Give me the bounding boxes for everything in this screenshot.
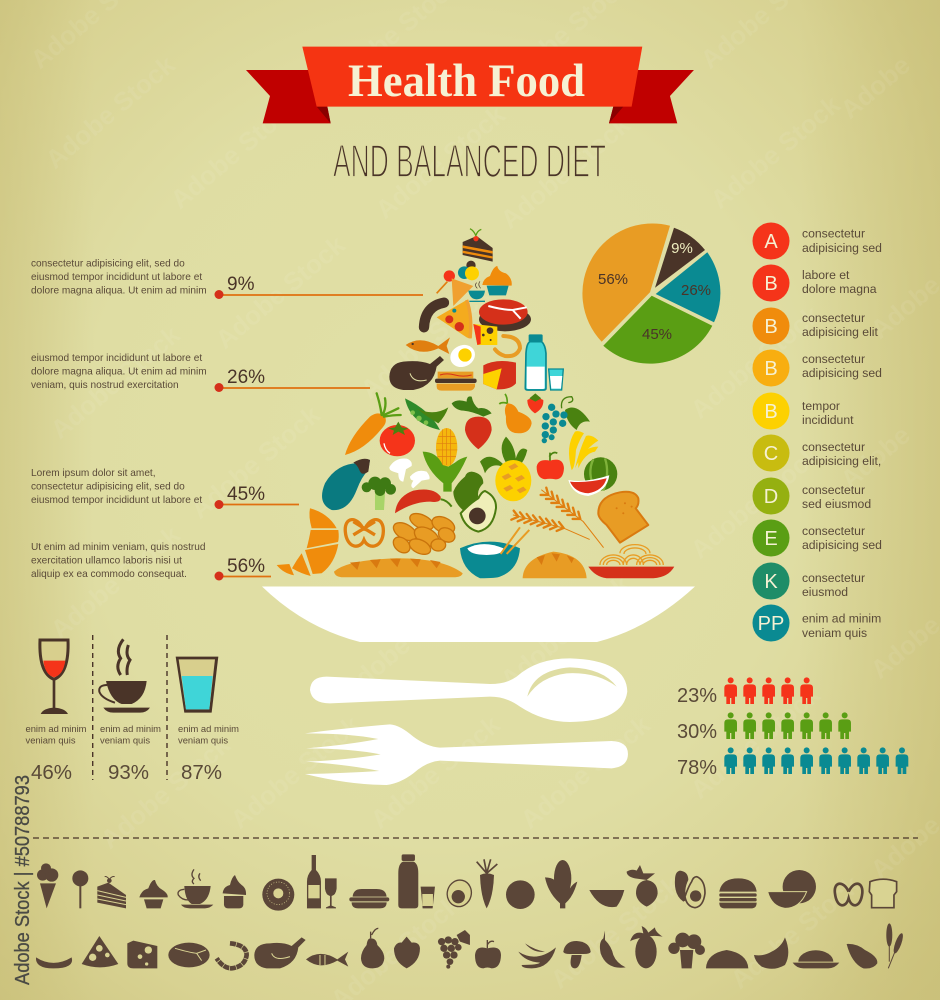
row 30%	[677, 712, 851, 743]
icon: mushrooms	[389, 458, 430, 488]
stock id caption: Adobe Stock | #50788793	[12, 775, 34, 985]
icon: baguette	[334, 558, 463, 577]
callout 26%: dolore magna aliqua. Ut enim ad minim	[31, 366, 207, 378]
legend B2: B	[764, 316, 778, 338]
food pyramid	[277, 229, 674, 578]
legend PP: PP	[758, 613, 784, 635]
icon: bananas	[569, 431, 598, 470]
icon: cupcake	[482, 266, 512, 295]
legend B4: incididunt	[802, 413, 854, 427]
ribbon right tail	[609, 70, 694, 123]
legend K: eiusmod	[802, 585, 848, 599]
title: Health Food: Health Food	[348, 55, 585, 107]
icon: strawberry	[527, 393, 543, 413]
icon: fish	[406, 337, 450, 354]
legend PP	[752, 604, 881, 642]
callout 9%	[31, 258, 423, 299]
icon: avocado	[675, 871, 705, 908]
legend B2: adipisicing elit	[802, 325, 878, 339]
legend PP: enim ad minim	[802, 612, 881, 626]
legend B1: dolore magna	[802, 282, 877, 296]
row 78%	[677, 747, 908, 779]
icon: watermelon	[768, 870, 816, 908]
icon: wine glass	[325, 878, 337, 908]
legend C: consectetur	[802, 440, 865, 454]
icon: cheese	[127, 941, 157, 968]
icon: fish	[306, 952, 348, 967]
icon: toast	[869, 879, 897, 908]
drink captions: veniam quis	[26, 734, 76, 746]
icon: cone	[37, 863, 58, 908]
icon: grapes	[542, 397, 590, 443]
icon: bananas	[518, 943, 556, 968]
legend B2	[752, 308, 878, 344]
legend E: consectetur	[802, 524, 865, 538]
icon row right	[475, 859, 905, 969]
icon: eggplant	[322, 459, 370, 510]
drink captions: veniam quis	[178, 734, 228, 746]
icon: carrot	[477, 859, 497, 908]
callout 45%	[31, 468, 299, 509]
icon: wheat	[886, 923, 905, 968]
callout 26%	[31, 353, 370, 392]
icon: pasta plate	[588, 545, 674, 578]
icon: wine glass	[40, 640, 68, 714]
legend D: D	[764, 486, 778, 508]
icon: sausage	[424, 303, 444, 327]
drink captions: veniam quis	[100, 734, 150, 746]
text: Adobe Stock	[335, 579, 476, 705]
icon: pretzel	[835, 884, 862, 905]
pie chart: 9%	[671, 240, 693, 257]
legend K: K	[764, 571, 778, 593]
ribbon centre	[302, 47, 642, 107]
drink percentages	[31, 761, 222, 784]
text: Adobe Stock	[355, 279, 496, 405]
icon: pretzel	[345, 520, 383, 546]
icon: tomato	[506, 880, 535, 909]
legend C	[752, 434, 881, 472]
text: Adobe Stock	[40, 49, 181, 175]
callout 45%: eiusmod tempor incididunt ut labore et	[31, 495, 202, 506]
plate	[262, 586, 695, 642]
icon: hot dog	[435, 372, 477, 391]
icon: wheat	[511, 488, 603, 547]
icon: radish	[627, 865, 658, 907]
icon: hot dog	[349, 889, 389, 908]
icon: toast	[598, 492, 648, 543]
icon: shrimp	[495, 336, 520, 356]
spoon	[310, 658, 627, 722]
icon: lollipop	[72, 870, 88, 908]
text: Adobe	[835, 420, 916, 495]
icon: chicken	[254, 937, 306, 968]
icon: bottle	[398, 854, 418, 908]
icon: pineapple	[480, 437, 531, 501]
callout 56%: aliquip ex ea commodo consequat.	[31, 569, 187, 580]
legend PP: veniam quis	[802, 626, 867, 640]
icon: apple	[475, 940, 501, 968]
drinks panel	[26, 635, 239, 784]
icon: teacup	[468, 281, 485, 301]
legend D: consectetur	[802, 483, 865, 497]
icon: lollipop	[437, 270, 455, 293]
subtitle: AND BALANCED DIET	[333, 135, 606, 187]
pie chart: 26%	[681, 282, 711, 299]
icon: cupcake	[139, 880, 168, 908]
icon: pear	[499, 394, 532, 433]
row 30%: 30%	[677, 721, 717, 743]
icon: cheese wedge	[473, 324, 497, 345]
legend B2: consectetur	[802, 311, 865, 325]
icon: mushroom	[563, 941, 591, 968]
icon: sausage	[36, 957, 72, 968]
legend B3: B	[764, 358, 778, 380]
callout 56%: Ut enim ad minim veniam, quis nostrud	[31, 542, 205, 553]
legend D	[752, 478, 871, 514]
icon: bread	[706, 950, 748, 968]
icon: broccoli	[668, 933, 705, 968]
legend B1: B	[764, 273, 778, 295]
drink captions: enim ad minim	[26, 723, 87, 734]
text: Adobe Stock	[495, 569, 636, 695]
icon: corn	[423, 428, 467, 492]
pie chart: 56%	[598, 271, 628, 288]
fork	[305, 724, 628, 785]
pie chart: 45%	[642, 326, 672, 343]
icon: peas	[589, 890, 624, 907]
icon: steak	[479, 299, 531, 331]
ribbon left tail	[246, 70, 331, 123]
legend B3: consectetur	[802, 352, 865, 366]
icon: coffee	[178, 869, 213, 908]
icon: cake	[463, 229, 493, 262]
icon: grapes	[438, 930, 470, 969]
icon: rice bowl	[460, 527, 529, 578]
legend A: consectetur	[802, 226, 865, 240]
icon: avocado	[453, 472, 496, 532]
text: Adobe Stock	[165, 89, 306, 215]
vitamin legend	[752, 222, 882, 642]
drink captions: enim ad minim	[178, 723, 239, 734]
legend K: consectetur	[802, 571, 865, 585]
icon: corn	[545, 860, 577, 908]
icon: strawberry	[394, 937, 420, 968]
icon: bread loaf	[523, 552, 587, 578]
drink percentages: 87%	[181, 761, 222, 784]
icon: glass	[421, 887, 435, 908]
title banner	[246, 47, 694, 123]
callout 45%: 45%	[227, 484, 265, 505]
icon: tomato	[380, 422, 415, 456]
icon: cake	[97, 877, 126, 908]
text: Adobe Stock	[45, 319, 186, 445]
callout 56%: 56%	[227, 556, 265, 577]
icon: water glass	[176, 657, 218, 713]
icon: croissant	[754, 937, 788, 969]
callout 9%: dolore magna aliqua. Ut enim ad minim	[31, 286, 207, 296]
icon: pizza	[82, 936, 118, 967]
callout 56%	[31, 542, 271, 580]
icon: chili	[600, 931, 626, 968]
icon: eggplant	[847, 944, 877, 968]
pie chart	[582, 223, 720, 364]
icon: cheese wheel	[483, 361, 516, 389]
callout 9%: eiusmod tempor incididunt ut labore et	[31, 272, 202, 283]
icon: ice cream	[452, 261, 479, 306]
icon: chili	[395, 489, 452, 513]
text: Adobe Stock	[725, 869, 866, 995]
icon: carrot	[345, 393, 401, 455]
icon: coffee cup	[99, 639, 150, 713]
icon: wine bottle	[307, 855, 321, 908]
icon: broccoli	[362, 477, 396, 510]
callout 9%: 9%	[227, 274, 255, 295]
text: Adobe Stock	[365, 709, 506, 835]
legend B3	[752, 350, 882, 386]
icon: croissant	[277, 508, 339, 576]
icon: steak	[168, 943, 210, 967]
text: Adobe Stock	[685, 679, 826, 805]
icon row left	[36, 854, 474, 969]
callout 26%: eiusmod tempor incididunt ut labore et	[31, 353, 202, 364]
legend B3: adipisicing sed	[802, 366, 882, 380]
callout 56%: exercitation ullamco laboris nisi ut	[31, 556, 182, 566]
people statistics	[677, 677, 908, 779]
icon: milk bottle	[525, 334, 546, 390]
legend E	[752, 520, 882, 556]
text: Adobe Stock	[370, 99, 511, 225]
text: Adobe Stock	[95, 729, 236, 855]
icon: apple	[537, 452, 564, 479]
legend A: adipisicing sed	[802, 241, 882, 255]
legend B1: labore et	[802, 268, 850, 282]
text: Adobe Stock	[515, 709, 656, 835]
icon: pizza	[437, 300, 472, 338]
text: Adobe Stock	[705, 89, 846, 215]
text: Adobe Stock	[225, 709, 366, 835]
text: Adobe Stock	[185, 399, 326, 525]
text: Adobe Stock	[210, 229, 351, 355]
legend E: E	[764, 528, 778, 550]
icon: pineapple	[630, 926, 663, 968]
text: Adobe Stock	[685, 439, 826, 565]
icon: pasta	[793, 950, 839, 968]
row 78%: 78%	[677, 757, 717, 779]
callout 26%: 26%	[227, 367, 265, 388]
icon: pear	[361, 928, 384, 968]
legend E: adipisicing sed	[802, 538, 882, 552]
drink captions	[26, 723, 239, 746]
icon: milk glass	[549, 369, 563, 390]
drink captions: enim ad minim	[100, 723, 161, 734]
legend B4: tempor	[802, 399, 840, 413]
legend A: A	[764, 231, 778, 253]
row 23%: 23%	[677, 685, 717, 707]
icon: shrimp	[217, 943, 247, 968]
legend C: adipisicing elit,	[802, 454, 881, 468]
text: Adobe Stock	[545, 869, 686, 995]
icon: egg	[447, 341, 479, 371]
icon: radish	[452, 396, 492, 449]
icon: burger	[719, 878, 757, 908]
drink percentages: 46%	[31, 761, 72, 784]
callout 26%: veniam, quis nostrud exercitation	[31, 380, 179, 391]
icon: muffin	[223, 875, 246, 908]
text: Adobe Stock	[685, 299, 826, 425]
legend C: C	[764, 443, 778, 465]
icon: challah bread	[390, 510, 457, 557]
text: Adobe Stock	[495, 109, 636, 235]
callout 9%: consectetur adipisicing elit, sed do	[31, 258, 185, 270]
icon: egg	[444, 877, 474, 909]
icon: donut	[262, 879, 294, 911]
legend B1	[752, 264, 877, 302]
legend K	[752, 562, 865, 600]
legend A	[752, 222, 882, 260]
legend D: sed eiusmod	[802, 497, 871, 511]
row 23%	[677, 677, 813, 707]
text: Adobe	[835, 50, 916, 125]
legend B4: B	[764, 401, 778, 423]
icon: chicken	[389, 356, 444, 390]
callout 45%: Lorem ipsum dolor sit amet,	[31, 468, 156, 479]
icon: watermelon	[568, 457, 617, 496]
text: Adobe Stock	[45, 519, 186, 645]
icon: peas	[405, 398, 448, 430]
legend B4	[752, 392, 854, 430]
side callouts: percent lines	[31, 258, 423, 580]
callout 45%: consectetur adipisicing elit, sed do	[31, 482, 185, 492]
drink percentages: 93%	[108, 761, 149, 784]
